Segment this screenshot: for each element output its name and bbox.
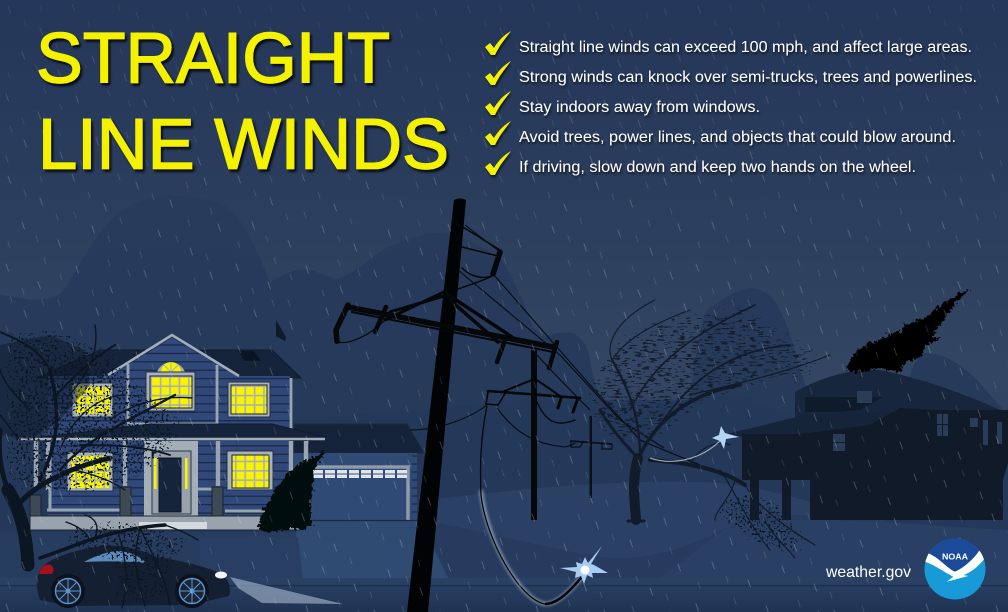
distant mountains [0,196,1008,612]
NOAA logo: NOAA [942,552,968,562]
front steps [139,522,207,529]
middle-ground hills [0,395,1008,612]
fallen branch on car [40,514,205,610]
upper roof [795,370,1008,440]
checklist text: Avoid trees, power lines, and objects that could blow around. [519,129,956,146]
house [18,335,325,530]
right house silhouette [726,370,1008,520]
stilts [750,480,759,520]
road [0,578,1008,612]
insulators [336,252,557,368]
foundation [30,516,300,530]
upper walls [742,408,1008,480]
garage wall [294,453,417,521]
front lawn and driveway [0,520,452,590]
second spark on tree [650,426,739,461]
checklist text: If driving, slow down and keep two hands on the wheel. [519,159,916,176]
stone pillars [30,487,311,516]
windows [833,414,1002,451]
dormer [805,397,883,412]
rear wheel [51,574,85,608]
car windows [84,551,146,563]
headlight beam [230,577,343,604]
weather.gov label: weather.gov [825,564,911,581]
check marks [485,31,511,175]
second utility pole [486,350,580,520]
tree crown [0,322,190,500]
roof vent [238,351,261,361]
gable trim [108,335,239,376]
trunk and limbs [0,325,192,565]
left tree [0,322,192,565]
lower left window [67,452,113,491]
conifer on roof [846,288,970,372]
title: STRAIGHT [36,20,390,98]
garage roof [294,424,424,453]
downed power line and spark [481,406,608,604]
lower right window [227,451,273,490]
trunk and limbs [600,300,830,558]
upper right window [228,382,270,417]
right tree [578,298,835,562]
checklist text: Stay indoors away from windows. [519,99,760,116]
garage door trim [300,467,408,521]
safety checklist [485,31,977,176]
third utility pole [570,416,612,498]
title [36,20,449,184]
lower roof [726,412,1008,440]
main utility pole [336,198,557,612]
porch columns [36,441,306,490]
hanging branches [712,482,820,562]
crossarms [348,224,553,352]
flying debris [276,320,286,341]
wind-blown canopy [578,298,835,455]
car [37,546,343,608]
porch roof [18,424,325,440]
checklist text: Straight line winds can exceed 100 mph, and affect large areas. [519,39,972,56]
checklist text [519,39,977,176]
arched window [157,362,185,372]
checklist text: Strong winds can knock over semi-trucks, trees and powerlines. [519,69,977,86]
tail light [39,565,53,574]
shrub [259,450,326,532]
spark burst [560,546,608,584]
front door [144,441,198,516]
upper left window [72,383,113,417]
front wheel [175,574,209,608]
main roof [36,350,301,378]
upper wall [48,376,290,442]
garage door windows [313,470,407,478]
lower walls [810,480,1003,520]
title: LINE WINDS [38,106,449,184]
garage [294,424,424,521]
upper center window [146,372,195,411]
dark upper mass [0,335,90,440]
headlight [215,572,227,578]
car body [37,546,230,606]
lower wall [48,438,290,516]
NOAA logo [924,538,986,600]
power lines [410,225,700,465]
porch rails [47,450,300,511]
